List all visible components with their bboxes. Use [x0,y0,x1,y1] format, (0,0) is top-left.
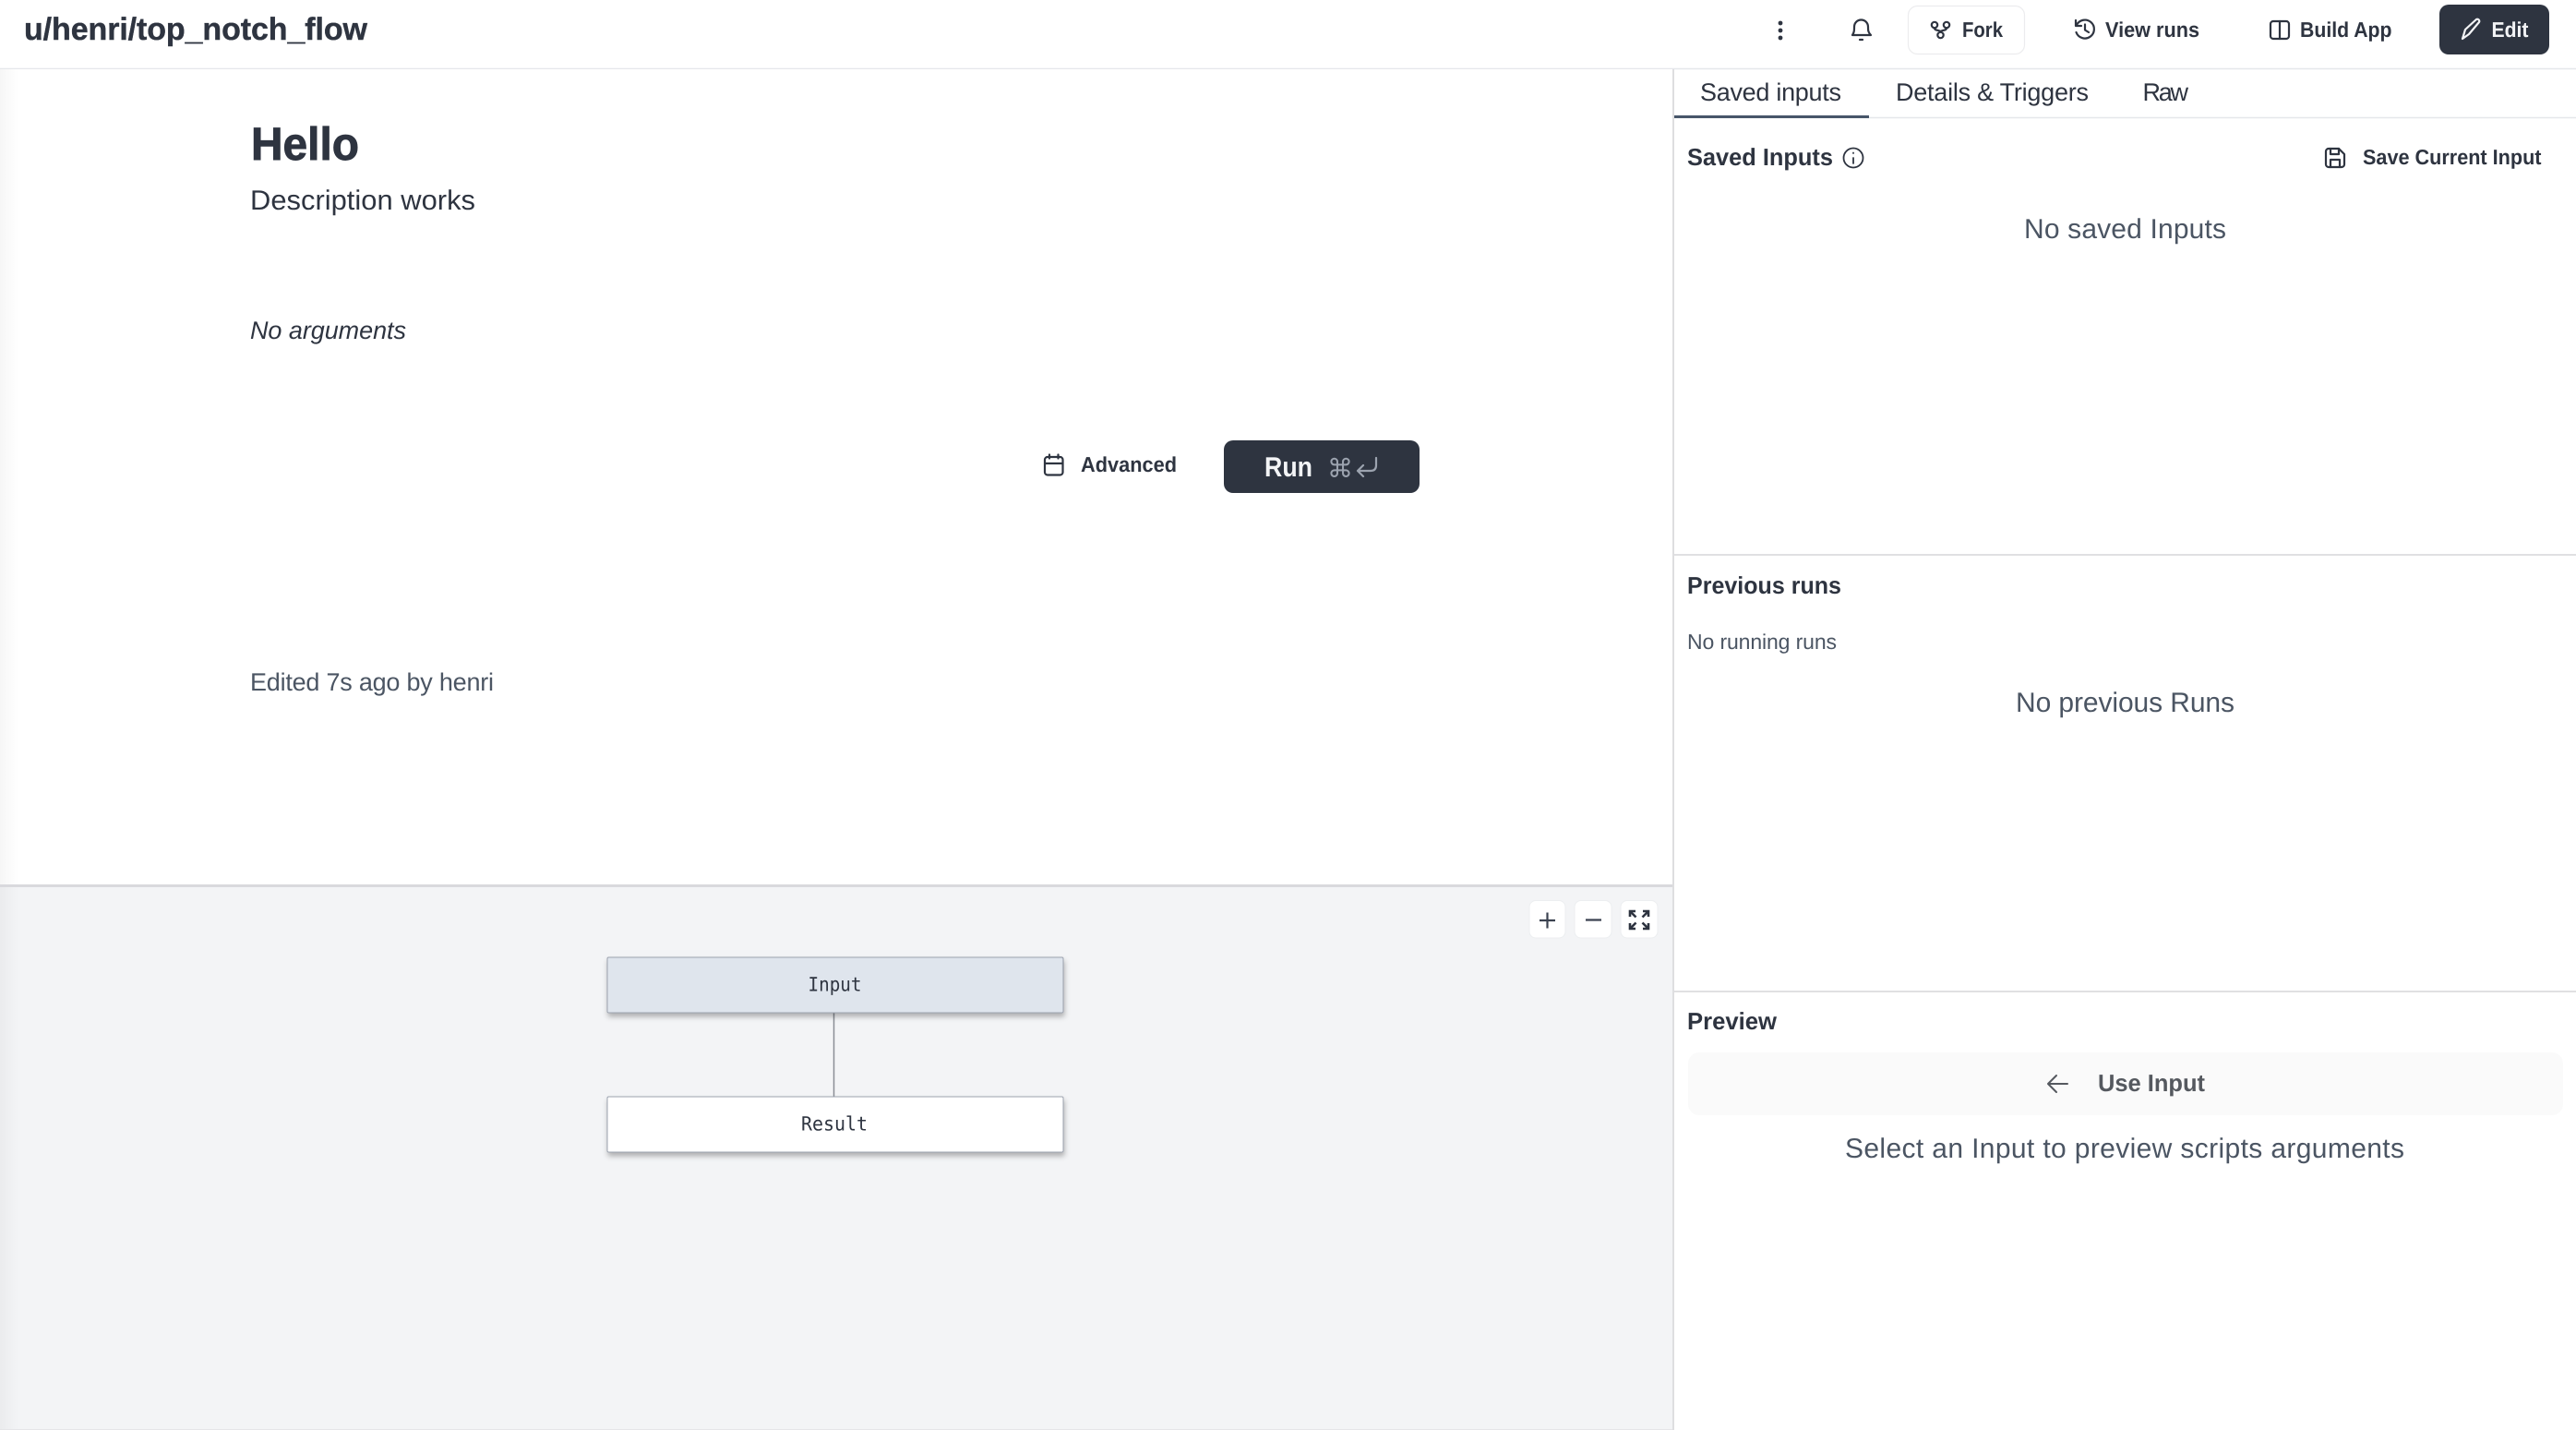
node: Result [607,1097,1063,1152]
text: no arguments: No arguments [250,317,406,344]
tab: Saved inputs: Saved inputs [1700,78,1841,106]
panel: flow run form [0,69,1672,885]
button: zoom in [1529,901,1565,938]
button: Run [1224,440,1420,493]
button: save current input: Save Current Input [2363,145,2542,169]
text: edited info: Edited 7s ago by henri [250,668,494,696]
button: fit view [1621,901,1658,938]
tab: Raw: Raw [2143,78,2189,106]
icon: notification bell [1852,20,1871,40]
button: use input: Use Input [2098,1069,2205,1097]
button: Edit: Edit [2492,18,2529,42]
heading: flow summary: Hello [251,118,359,170]
section: preview: Preview [1687,1007,1778,1035]
node: Input: Input [809,973,862,995]
section: preview [1687,1007,2563,1164]
button: use input [1688,1052,2563,1115]
node: Input [607,957,1063,1013]
node: Result: Result [801,1113,868,1136]
panel: flow graph [0,884,1672,1430]
text: empty saved inputs: No saved Inputs [2024,214,2226,245]
button: Fork [1909,6,2025,54]
button: Edit [2439,5,2549,54]
text: no running runs: No running runs [1687,630,1837,654]
text: description: Description works [250,186,475,216]
icon: command key: ⌘ [1327,453,1353,484]
panel: top header bar [0,0,2576,69]
connector: input to result [833,1013,834,1097]
icon: info [1844,148,1863,168]
button: Fork: Fork [1962,18,2003,42]
button: zoom out [1575,901,1611,938]
text: preview hint: Select an Input to preview scripts arguments [1845,1134,2404,1164]
button: Advanced: Advanced [1081,452,1177,476]
tab: Details & Triggers: Details & Triggers [1896,78,2089,106]
section: previous runs [1687,571,2235,718]
button: View runs: View runs [2105,18,2199,42]
icon: return key [1358,458,1376,476]
text: empty previous runs: No previous Runs [2016,688,2235,718]
tabs [1674,78,2576,118]
button: Build App: Build App [2300,18,2392,42]
section: saved inputs [1687,143,2542,245]
panel: right sidebar [1672,69,2576,1430]
heading: flow path: u/henri/top_notch_flow [24,12,368,47]
button: Advanced [1045,452,1177,476]
section: previous runs: Previous runs [1687,571,1841,599]
button: Run: Run [1264,452,1312,483]
icon: more options [1779,21,1782,40]
section: saved inputs: Saved Inputs [1687,143,1833,171]
